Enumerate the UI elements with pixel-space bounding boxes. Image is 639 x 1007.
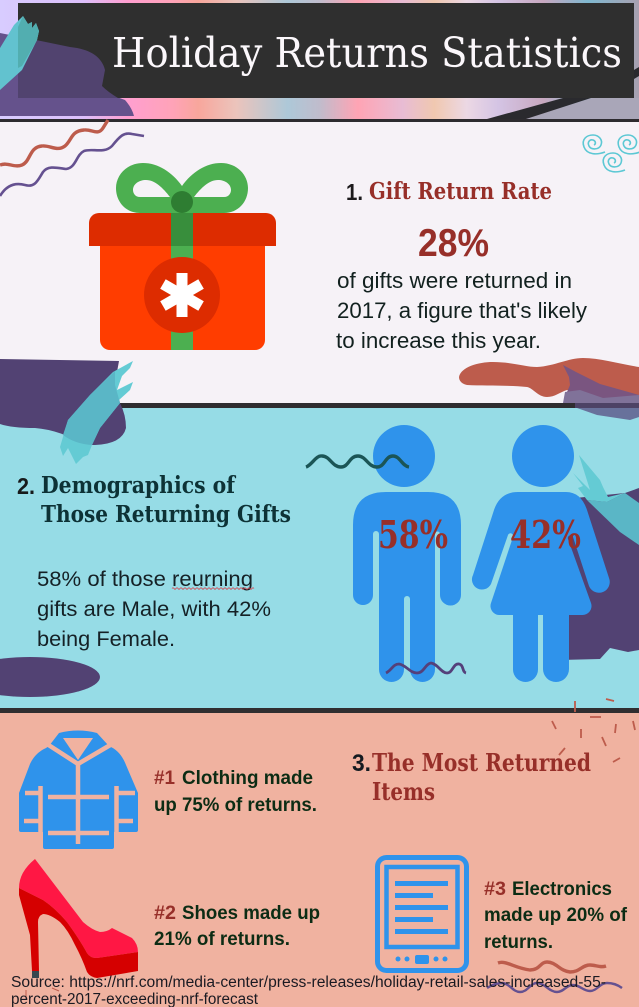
text: shoes: #2 [154,903,176,924]
heading: demographics: 2. [17,473,35,499]
decoration: dark teal wave [306,456,409,467]
text: demographics description [37,567,271,651]
panel: gift return rate [0,119,639,404]
decoration: lower left purple blob [0,657,100,697]
icon: high heel shoe [19,859,138,978]
decoration: right teal brush [573,455,639,545]
decoration: teal spirals [583,135,639,172]
text: demographics description: gifts are Male, with 42% [37,597,271,621]
decoration: purple wave [0,134,144,196]
decoration: salmon blob right [459,358,639,397]
decoration: purple wave [386,663,466,673]
heading: demographics: Those Returning Gifts [41,501,291,528]
decoration: lower-left teal brush [60,361,133,464]
icon: e-reader tablet [378,858,466,970]
stat: 28%: 28% [418,222,489,265]
text: clothing: #1 [154,768,175,789]
heading: most returned items [352,748,591,806]
heading: demographics [17,472,291,528]
text: clothing: up 75% of returns. [154,795,317,816]
decoration: spellcheck underline [172,588,254,589]
text: shoes [154,903,320,950]
decoration: right purple blob [560,488,639,660]
panel: most returned items [0,699,639,1007]
text: gift return description [336,268,587,353]
text: source [11,974,606,1007]
icon: jacket [19,730,138,849]
text: electronics: Electronics [512,879,612,900]
text: demographics description: 58% of those reurning [37,567,253,591]
stat: 42%: 42% [510,512,581,557]
text: shoes: Shoes made up [182,903,320,924]
decoration: red wave [0,120,108,166]
icon: female figure [472,425,610,682]
panel: demographics [0,403,639,709]
text: clothing [154,768,317,816]
text: electronics [484,879,628,953]
text: electronics: returns. [484,932,553,953]
decoration: bottom purple wave [487,983,622,992]
decoration: lower-left purple blob across sections [0,359,126,445]
text: gift return description: 2017, a figure that's likely [337,298,587,323]
decoration: red dashes [552,699,635,762]
text: gift return description: of gifts were returned in [337,268,572,293]
title box [18,3,634,98]
decoration: header blob over box [0,16,118,98]
text: clothing: Clothing made [182,768,313,789]
panel: header background [0,0,639,119]
text: electronics: #3 [484,879,506,900]
icon: gift [89,163,276,350]
text: gift return description: to increase this year. [336,328,541,353]
text: shoes: 21% of returns. [154,929,290,950]
heading: most returned items: The Most Returned [372,748,591,777]
icon: male figure [353,425,461,682]
heading: most returned items: 3. [352,750,371,777]
stat: 58%: 58% [378,512,448,557]
decoration: faint red marks near source [26,988,59,1000]
heading: demographics: Demographics of [41,472,237,499]
decoration: bottom red wave [498,962,606,972]
decoration: header purple blob under box [0,33,134,116]
text: source: Source: https://nrf.com/media-center/press-releases/holiday-retail-sales-increased-55- [11,974,606,991]
heading: most returned items: Items [372,777,435,806]
text: electronics: made up 20% of [484,905,628,926]
decoration: purple brush right [563,365,639,420]
heading: gift return rate: 1. [346,179,363,205]
text: demographics description: being Female. [37,627,175,651]
heading: gift return rate: Gift Return Rate [369,178,552,205]
